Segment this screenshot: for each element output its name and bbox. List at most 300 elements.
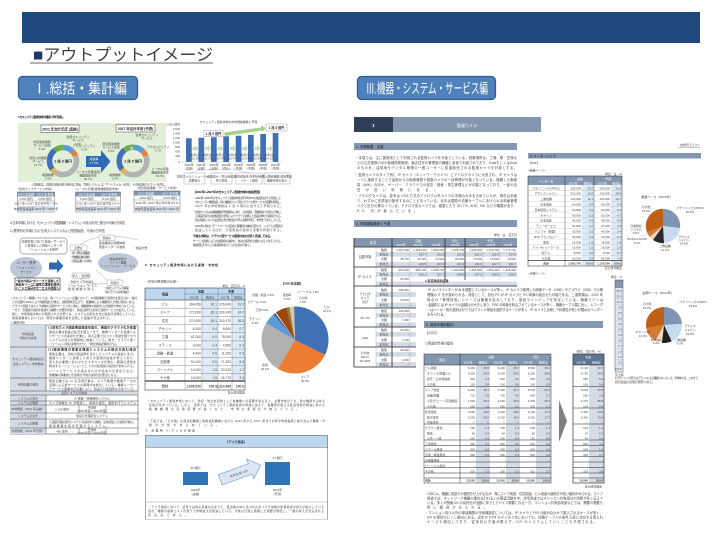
table: maker share volume: 【PDF】 [528, 161, 540, 165]
heading: market comparison: <市場分野規模の比較> [146, 278, 178, 284]
chart: market size bars: 前年比 [253, 152, 261, 157]
chart: pie volume share: 5.1% [634, 241, 641, 245]
text block: application commentary [425, 491, 604, 524]
table: maker share value partial: 4.3 [618, 328, 622, 332]
table: market by sector: 合計 [162, 383, 169, 388]
chart: pie value share: 金額ベース（2022年） [642, 290, 674, 295]
table: market size history: 107.8 [437, 262, 444, 266]
table: maker share volume: 34,500 [572, 224, 581, 228]
table: market by sector: 6.4 [239, 335, 244, 339]
table: application trends actual: 2.7 [546, 394, 550, 398]
table: application trends forecast: 200 [583, 447, 588, 451]
table: application trends actual: 700 [470, 394, 475, 398]
table: application trends actual: 用途 [439, 357, 445, 362]
table: market size history: 64,000 [400, 328, 409, 332]
table: application trends actual: 小売/チェーン/流通施設 [427, 398, 457, 403]
table: small summary tables: 参加年度成長率 2022 年〜2027 年 [76, 206, 120, 211]
value box 2022 [204, 130, 223, 136]
table: application trends actual: 3.3 [485, 469, 489, 473]
table: market size history: 103.9 [457, 262, 464, 266]
table: maker share volume: 100.0 [586, 262, 593, 266]
table: application trends actual: 集合住宅 [427, 414, 439, 419]
text block: market commentary: 関連事業者においては、既存の事業基盤を活用した展開が見込まれる。 [12, 315, 112, 320]
table: application trends actual: パーソナル用途 [425, 463, 445, 468]
table: small summary tables: 6,400 億円 [80, 196, 94, 201]
table: small summary tables: 2,500 億円 [163, 195, 177, 200]
text block: application installation: もみられる。 [427, 312, 447, 316]
chart: pie value share: 二進電機 [674, 337, 686, 342]
table: application trends actual: 1.4 [546, 426, 550, 430]
table: maker share volume: 3.3 [617, 224, 621, 228]
table: market size history: 金額 [381, 357, 387, 362]
table: market by sector: 工場 [162, 334, 169, 339]
chart: market size bars: 1,400 [173, 132, 180, 136]
table: application trends actual: 35.5 [483, 366, 489, 370]
table: market by sector: 実績 [198, 288, 204, 294]
table: small summary tables: 2022 年実績 [79, 192, 95, 196]
table: market size history: 76,900 [507, 257, 516, 261]
table: maker share volume: 66,000 [601, 202, 610, 206]
table: market size history: - [408, 314, 409, 318]
table: market size history: - [408, 252, 409, 256]
table: application trends forecast: △ [585, 420, 588, 424]
table: market size history: - [408, 352, 409, 356]
table: application trends actual: 住宅用途 [425, 409, 437, 414]
table: maker share volume: 0.7 [617, 251, 621, 255]
chart: market size bars: 2023年 [221, 162, 231, 167]
table: application trends actual: 800 [500, 377, 505, 381]
table: maker share volume: 60,000 [601, 208, 610, 212]
table: maker share value partial [611, 274, 624, 377]
chart: pie value share: 23.8% [689, 304, 698, 308]
table: application trends actual: 20.0 [483, 415, 489, 419]
table: application trends actual: 0.9 [485, 436, 489, 440]
callouts: 市場成長率 在宅利用の [234, 174, 264, 178]
text block: application installation: ーはメーカー別の選択ばかりではブランド単品を選択するケースが多く、IP カメラと比較して利便性が高いが類似のベンダー [427, 307, 603, 312]
table: market size history: 台数市場 [359, 254, 372, 259]
table: market by sector [145, 283, 245, 390]
table: market size history: IP カメラ [358, 274, 372, 279]
chart: market size bars: 600 [175, 150, 180, 154]
text block: overview: ーソに接続することで遠隔からの画像確認や複数カメラの一括管理が可能となっている。機器した画像 [357, 177, 518, 182]
table: maker share volume: 5.9 [617, 202, 621, 206]
donut labels: 制御機器 [109, 172, 121, 177]
heading: system adoption: 4. 日本市場における「セキュリティ関連機器・システム」の導入状況と各社の今後の方向性 [10, 220, 126, 225]
panel: donut comparison: 2027 年会計年度 (予測) [118, 126, 153, 131]
table: application trends actual: 25.2 [483, 399, 489, 403]
table: application trends actual: スクール用途 [425, 446, 442, 451]
table: market by sector: 78,000 [221, 335, 231, 339]
button: section I heading: Ⅰ.総括・集計編 [33, 80, 127, 96]
table: maker share volume: 100.0 [614, 262, 621, 266]
table: maker share volume: 2022年 [568, 180, 578, 185]
donut labels: アクセシビリティ [73, 143, 96, 148]
chart: pie 2022 results: ストア [301, 374, 309, 379]
table: maker share value partial: 1.8 [618, 350, 622, 354]
table: application trends actual: - [549, 464, 550, 468]
table: application trends actual: 17.3 [544, 415, 550, 419]
table: market size history: 1,207,000 [396, 248, 409, 252]
table: application trends actual: ビル用途 [425, 365, 437, 370]
text block: application commentary: いる。多くが関東 DX の系列化が活動に伴うとデバイス需要となる一方、マンション共有部用途などでは、需要の需要も [427, 500, 603, 505]
chart: pie volume share: 18.5% [680, 242, 689, 246]
donut labels: 63.7% [84, 177, 93, 181]
table: application trends actual: その他 [425, 468, 434, 473]
heading: function analysis: 1.機能分析 [11, 320, 25, 324]
text block: application commentary: ケースも増加しており、従来向け方面が限らず、DR のシステムしていくことも予想される。 [427, 519, 597, 524]
chart: market size bars: (実績) [197, 166, 205, 170]
chart: market size bars: 2025年 [246, 162, 256, 167]
note under donuts: ※成長率は、2年間の成長の伸び率を基に算出。「防犯システム」は「ゲートカメラ」を含む、その他は各カテゴリーを含む。 [31, 182, 167, 186]
diagram: market users and suppliers: 新規市場に向けた製品・サービス [22, 238, 65, 244]
table: function analysis: システムの割合 [18, 396, 38, 400]
donut labels: 5.3% [108, 149, 115, 153]
table: market by sector: 376,040 [219, 302, 231, 306]
donut labels: 防犯関連機器 [102, 141, 120, 146]
chapter header [354, 117, 541, 132]
table: market size history: 前年比 [380, 352, 388, 356]
table: application trends forecast: 35.8 [597, 372, 603, 376]
table: application trends forecast: 100.0 [596, 478, 603, 482]
table: application trends actual: 金融業用途 [425, 457, 440, 462]
table: maker share volume: 200,000 [571, 192, 581, 196]
diagram: market users and suppliers: 製品をベースに顧客の課題を解決 [16, 282, 59, 286]
table: market by sector: 1,006,510 [186, 384, 201, 388]
table: application trends forecast: 3.3 [599, 442, 603, 446]
table: market by sector: 金融・鉄道 [157, 351, 174, 356]
table: maker share volume: パナソニック(i-PRO) [532, 185, 560, 190]
table: market size history: 前年比 [380, 272, 388, 276]
table: maker share volume: 85,000 [601, 256, 610, 260]
table: function analysis: システムの導入を積極的に推進している。他方、クラウド型ソ [49, 337, 136, 342]
table: application trends forecast: 0.6 [599, 404, 603, 408]
chapter header: 1 [372, 123, 375, 128]
text block: market commentary: クラウド関連ではカメラ映像の活用やサービス化に進む。機器単体の提供からの脱却が求められている。 [12, 303, 137, 308]
table: application trends actual: - [534, 464, 535, 468]
table: application trends forecast: 3.7 [599, 453, 603, 457]
table: application trends actual: 4.6 [515, 377, 519, 381]
bars [186, 133, 278, 162]
table: application trends actual: 600 [470, 442, 475, 446]
table: market size history: 106.3 [492, 252, 499, 256]
table: application trends forecast: 100 [583, 404, 588, 408]
table: maker share volume: 60,000 [572, 208, 581, 212]
chart: market size bars: 103.0% [215, 156, 225, 160]
table: maker share volume: 18.6 [615, 192, 621, 196]
table: maker share value partial: 4.6 [618, 322, 622, 326]
table: market size history: 1,000 [402, 358, 409, 362]
table: application trends actual: 6,400 [468, 366, 475, 370]
chart: market size bars: 前年比 [191, 152, 199, 157]
table: application trends forecast: （単位：百万円、%） [574, 348, 603, 354]
table: market size history: 105.5 [509, 272, 516, 276]
table: maker share volume: 構成比 [612, 180, 621, 185]
table: market size history: 104,000 [399, 309, 409, 313]
chart: market size bars: (実績) [185, 166, 193, 170]
table: market size history: 1,350,000 [486, 268, 499, 272]
table: application trends actual: 20.0 [483, 410, 489, 414]
table: market by sector: 0.4 [239, 343, 244, 347]
text block: application installation: ・IP カメラベンダーが AI を搭載しているケースが多く、IP カメラで取得した映像データ（VMS）やクラウド（VSS）での管 [425, 287, 604, 292]
table: application trends actual: 100.0 [512, 478, 519, 482]
chart: pie 2022 results: 住宅 [262, 362, 268, 367]
table: maker share volume: <金額ベース> [528, 270, 546, 276]
table: function analysis: 市場規模（2024 年予測） [11, 428, 45, 433]
table: function analysis: 予測値 [88, 404, 96, 410]
chart: pie 2022 results: 5.0% [284, 297, 291, 301]
table: application trends actual: 17.3 [544, 410, 550, 414]
panel: forecast bar chart: 【アフラ用途】 [225, 439, 247, 444]
table: application trends forecast: 0.6 [599, 436, 603, 440]
table: maker share volume: キヤノン [540, 213, 552, 217]
chart: pie 2022 results [248, 280, 332, 383]
chart: pie value share: 19.0% [686, 332, 695, 336]
table: market size history: 101.3 [475, 252, 482, 256]
table: market size history: 106.9 [457, 252, 464, 256]
table: maker share volume: 52,000 [601, 213, 610, 217]
table: application trends actual: 合計 [425, 478, 431, 482]
donut labels: サービス市場 [33, 142, 51, 148]
table: maker share volume: 8,500 [574, 251, 581, 255]
table: function analysis: 関連企業は、自社の製品群を活かしたシステムの提案に注力。 [49, 351, 136, 356]
diagram: market users and suppliers: ハードと保守のサービスの提案へ [16, 285, 59, 290]
chart: pie value share [635, 290, 707, 346]
chart: market size bars [166, 119, 292, 184]
table: application trends actual: 100.0 [543, 478, 550, 482]
text block: sector commentary: ・下表では、「その他」の用途別機器と各用途別機器における 2022 年から 2027 年までの年平均成長率と拡大および機能・今 [147, 418, 325, 423]
table: maker share volume: 1.5 [617, 246, 621, 250]
table: application trends forecast: 13.8 [597, 410, 603, 414]
text block: sector commentary: 後の分析をまとめている。 [149, 422, 219, 427]
table: market size history: 2023年 [450, 242, 460, 247]
chart: pie value share: 5.3% [653, 341, 660, 345]
table: maker share volume: ハンファ（韓国） [534, 228, 558, 234]
text block: sector commentary: 各種機器の活用需要が多くなり、市場の多様化が進んでいる。 [149, 406, 299, 411]
table: market size history: 34,500 [400, 277, 409, 281]
table: market by sector: 1.5 [212, 368, 217, 372]
table: market by sector: 270,000 [189, 319, 201, 323]
text block: growth factors: セキュリティ機器全般、特に機器のカメラ及びクラウド型サービスの需要が増加し、 [195, 199, 283, 204]
table: maker share volume: 48,000 [601, 219, 610, 223]
table: application trends actual: 30.3 [544, 388, 550, 392]
table: application trends actual: オフィス/商業ビル [427, 370, 451, 376]
callouts: リモート関連 [240, 178, 258, 182]
table: application trends forecast: 5.0 [599, 377, 603, 381]
table: market size history: 2025年 [486, 242, 496, 247]
bar 2027 [265, 462, 290, 485]
table: application trends actual: 2023年 [523, 360, 533, 364]
table: maker share volume: 16,000 [601, 246, 610, 250]
donut labels: 2.1% [81, 148, 88, 152]
table: market size history: 見込 [452, 238, 458, 243]
table: application trends actual: △ [486, 420, 489, 424]
table: application trends actual: 店舗/商業 [427, 392, 439, 398]
table: maker share volume: 120,000 [600, 197, 610, 201]
table: market by sector: 0.4 [212, 343, 217, 347]
diagram: market users and suppliers: サービス [20, 269, 32, 274]
chart: pie 2022 results: パーソナル 1.5% [297, 289, 319, 294]
chart: market size bars: (予測) [272, 166, 279, 170]
table: application trends actual: 40 [472, 431, 475, 435]
diagram: market users and suppliers: ・他業種企業の連携 [70, 254, 90, 259]
table: maker share value partial: 3.1 [618, 360, 622, 364]
table: application trends actual: 実績 [488, 354, 494, 359]
donut labels: 21.7% [34, 163, 43, 167]
callouts: 需要拡大 [189, 178, 200, 182]
table: application trends actual: 1.0 [485, 404, 489, 408]
text block: sector commentary [145, 398, 325, 432]
table: application trends forecast [573, 348, 604, 483]
table: maker share volume: 予測 [605, 176, 611, 181]
text block: market commentary: との協業や M&A により機能強化が進む。連携領域が広がり、異業種による機器導入が進む環境にある。 [12, 299, 137, 304]
table: maker share volume: 3.2 [589, 224, 593, 228]
table: application trends actual: △ [516, 420, 519, 424]
table: application trends actual: 310 [530, 469, 535, 473]
chart: market size bars: 2021年 [196, 162, 206, 167]
table: function analysis: リューションの導入余地が大きく、今後の成長が期待される。 [49, 341, 119, 346]
diagram: market users and suppliers: ・関連企業への委託 [70, 258, 92, 263]
table: application trends actual: 3.3 [515, 469, 519, 473]
table: small summary tables: 2027 年予測 [101, 192, 117, 196]
table: application trends actual [424, 354, 551, 483]
text block: growth factors: 防災用途については自然災害の増加を背景に需要が増え、市場を下支えしている。 [195, 217, 283, 222]
table: maker share volume: 日本防犯システム [534, 207, 558, 212]
diagram: market users and suppliers: 関連機器の導入 [68, 286, 94, 291]
chart: market size bars: 1 兆 0 億円 [206, 131, 221, 136]
table: market by sector: 1,214,465 [216, 384, 231, 388]
table: application trends actual: 公共・一般 [427, 436, 442, 440]
table: application trends actual: 4,500 [468, 399, 475, 403]
table: application trends actual: 100 [500, 426, 505, 430]
chart: pie 2022 results: ビル [324, 304, 330, 309]
chart: pie 2022 results: 32.1% [323, 309, 332, 313]
table: market size history: 104.6 [509, 252, 516, 256]
table: market size history: 106.5 [492, 272, 499, 276]
arrow: growth: 2.7 5% [90, 161, 99, 165]
table: market by sector: パーソナル [157, 367, 174, 372]
table: application trends forecast: 30.0 [597, 388, 603, 392]
text block: growth factors: サービス連携による付加価値の提供が、各社の差別化の鍵となると考えられる。 [193, 238, 283, 243]
table: application trends actual: 1.2 [515, 404, 519, 408]
table: application trends forecast: 1.6 [599, 447, 603, 451]
table: market size history: SD-SDI) [360, 359, 370, 363]
table: function analysis: りサービスの多様化が進む。導入企業ではコスト低減を図りつつ [49, 333, 136, 338]
chart: pie 2022 results: 【2022年実績】 [281, 280, 303, 286]
table: maker share volume: 208,000 [600, 192, 610, 196]
panel: donut comparison: 1 兆 0 億円 [54, 158, 72, 164]
text block: application installation: 理機の IT 化が進められる。特性として、自社 PC が IP カメラと PC 映像の組合せも可能である。二進電機は、2022 年 [427, 292, 604, 297]
chart: market size bars: 102.0% [203, 156, 213, 160]
table: application trends actual: 3.3 [515, 453, 519, 457]
table: market by sector: ステール [158, 342, 172, 347]
table: maker share value partial: 26.5 [616, 289, 622, 293]
table: market size history: 100.7 [419, 252, 426, 256]
diagram: market users and suppliers: ・防犯カメラの導入 [68, 279, 94, 284]
table: application trends actual: 40 [502, 431, 505, 435]
text block: growth factors: 機器販売中心の事業構成からの転換が進む。 [193, 242, 253, 247]
chart: pie value share: その他 [643, 301, 651, 306]
table: market size history: 前年比 [380, 322, 388, 326]
button: section III heading: Ⅲ.機器・システム・サービス編 [366, 80, 488, 96]
table: market size history: - [408, 262, 409, 266]
source note: 富士経済推定 [228, 390, 245, 394]
table: application trends actual: 100 [530, 382, 535, 386]
chart: market size bars: 前年比 [216, 152, 224, 157]
table: maker share volume: 3. メーカーシェア [530, 153, 556, 158]
table: maker share volume: 2023年 [597, 180, 607, 185]
table: small summary tables: 2,050 億円 [38, 196, 52, 201]
table: maker share volume: 構成比 [584, 180, 592, 185]
table: application trends actual: 3.3 [546, 453, 550, 457]
table: maker share volume: 東芝 [543, 239, 549, 244]
table: market size history: 実績 [415, 238, 421, 243]
table: application trends actual: 600 [500, 453, 505, 457]
table: maker share value partial: 3.0 [618, 338, 622, 342]
panel: donut comparison [18, 123, 170, 182]
text block: growth factors: 【2022 年〜2027 年のセキュリティ関連市場の成長要因】 [193, 189, 262, 194]
table: market by sector: 2.2 [239, 376, 244, 380]
table: small summary tables: 1,800 億円 [139, 195, 153, 200]
table: small summary tables: 2022 年実績 [138, 190, 154, 196]
table: application trends actual: 200 [530, 447, 535, 451]
text block: overview: のものを、遠隔地やデジタル管理の一般ユーザーに直接販売される監視カメラを対象とする。 [357, 165, 517, 170]
chart: pie value share: BOSCH [651, 338, 661, 342]
table: application trends actual: 1.1 [546, 404, 550, 408]
table: application trends actual: 600 [530, 442, 535, 446]
table: market by sector: 6,400 [193, 352, 201, 356]
table: application trends forecast: 5,200 [581, 388, 588, 392]
table: application trends actual: 100.0 [482, 478, 489, 482]
table: market size history: 7,100 [402, 338, 409, 342]
callouts: 導入増加 [216, 178, 227, 182]
text block: overview: ・アナログカメラは、従来は VGA 方式のアナログ以外カメラの市場の大半を占めていたが、現在は全面 [355, 193, 518, 198]
table: market size history: - [408, 292, 409, 296]
table: market by sector: 30.1 [211, 302, 217, 306]
text block: overview: HD 化が進んでいる。 [357, 208, 417, 213]
table: market by sector: 構成比 [234, 294, 243, 300]
table: application trends actual: 0.3 [515, 431, 519, 435]
table: application trends forecast: 850 [583, 377, 588, 381]
table: application trends actual: - [474, 464, 475, 468]
panel: forecast bar chart: 95 億円 [191, 465, 201, 470]
table: maker share volume: 5.9 [589, 202, 593, 206]
value box 2027 [266, 124, 287, 131]
table: function analysis: AI 搭載・映像解析システム [74, 396, 110, 400]
table: maker share volume: 日本電産 [540, 202, 552, 206]
table: application trends forecast: 16,900 [579, 478, 588, 482]
chart: market size bars: 前年比 [228, 152, 236, 157]
table: maker share value partial: 10.1 [616, 300, 622, 304]
text block: application installation: 1.産業用途別設置 [425, 278, 449, 283]
table: market size history: - [408, 332, 409, 336]
title: output image: ■アウトプットイメージ [33, 46, 213, 64]
button: section III heading [358, 76, 496, 100]
table: application trends actual: - [474, 458, 475, 462]
diagram: market users and suppliers: 関連の [103, 235, 111, 240]
label: year: 【2021】 [425, 331, 438, 335]
table: market size history [0, 0, 517, 367]
table: market size history: - [408, 272, 409, 276]
text block: application commentary: DR の現状のにくし傾向にある。近年の DXR のデジタル化においても、同軸ケーブルの条件上部に対応する受入れ [427, 514, 604, 520]
donut labels: トータル管理 [151, 166, 169, 171]
table: application trends actual: 100 [470, 436, 475, 440]
table: market size history: - [408, 322, 409, 326]
chapter header: 監視カメラ [457, 122, 477, 128]
table: application trends forecast: 70 [585, 431, 588, 435]
text block: application installation: 時点の「管理技術」シリーズは機種を拡大しており、製品ラインナップを特定している。機器ラインは [427, 297, 604, 302]
section band: market size: 2. 市場規模推移と予測 [356, 221, 391, 226]
donut labels: 制御機器 [42, 172, 54, 177]
